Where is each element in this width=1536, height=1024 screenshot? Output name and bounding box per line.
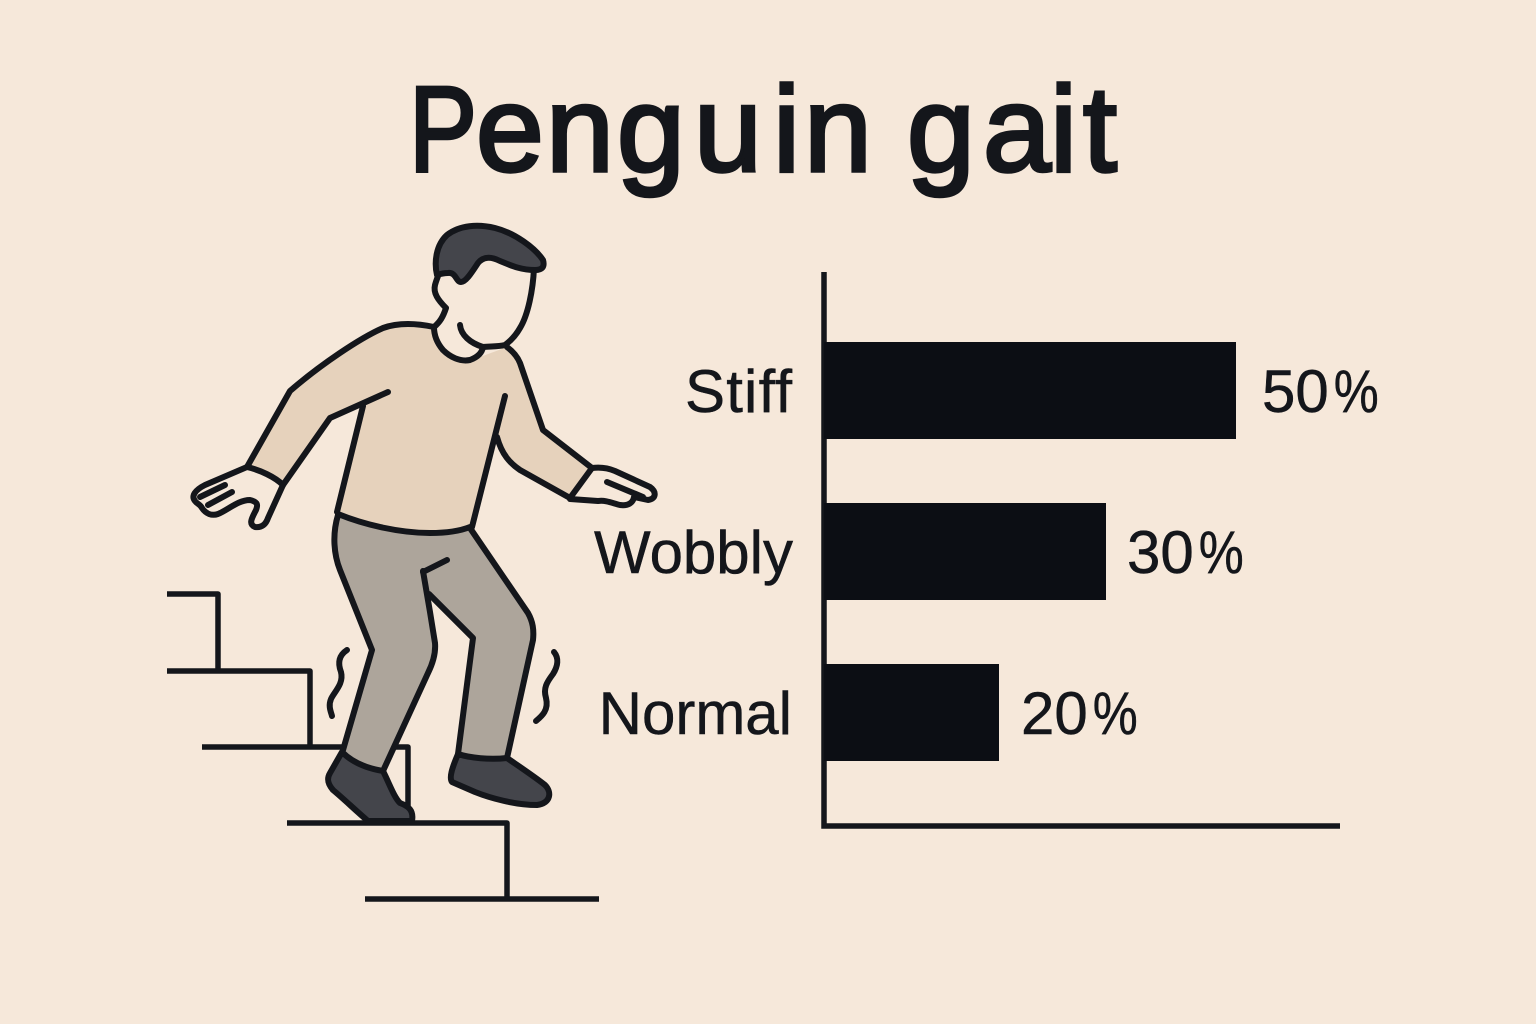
- bar: Stiff 50%: [685, 342, 1379, 439]
- bar: Stiff 50%: Stiff: [685, 358, 792, 425]
- title: enguin gait: [476, 61, 1117, 197]
- bar: Wobbly 30%: Wobbly: [594, 519, 793, 586]
- bar: Normal 20%: [599, 664, 1138, 761]
- right shoe: [451, 754, 549, 805]
- icon: left wobble lines: [330, 650, 347, 716]
- left hand: [193, 467, 283, 527]
- bar: Normal 20%: 20%: [1021, 680, 1138, 747]
- bar chart: [594, 272, 1379, 826]
- bar: Wobbly 30%: [594, 503, 1244, 600]
- icon: right wobble lines: [536, 652, 557, 721]
- title: P: [409, 61, 477, 197]
- chart axes: [824, 272, 1340, 826]
- bar: Stiff 50%: 50%: [1262, 358, 1379, 425]
- bar: Wobbly 30%: 30%: [1127, 519, 1244, 586]
- icon: staircase: [167, 594, 599, 899]
- head and face: [434, 226, 544, 360]
- left shoe: [328, 752, 412, 821]
- bar: Normal 20%: Normal: [599, 680, 792, 747]
- sweater: [247, 324, 592, 533]
- hair: [436, 226, 544, 282]
- pants: [334, 515, 533, 771]
- illustration: person walking down stairs: [193, 226, 655, 821]
- right hand: [570, 468, 655, 505]
